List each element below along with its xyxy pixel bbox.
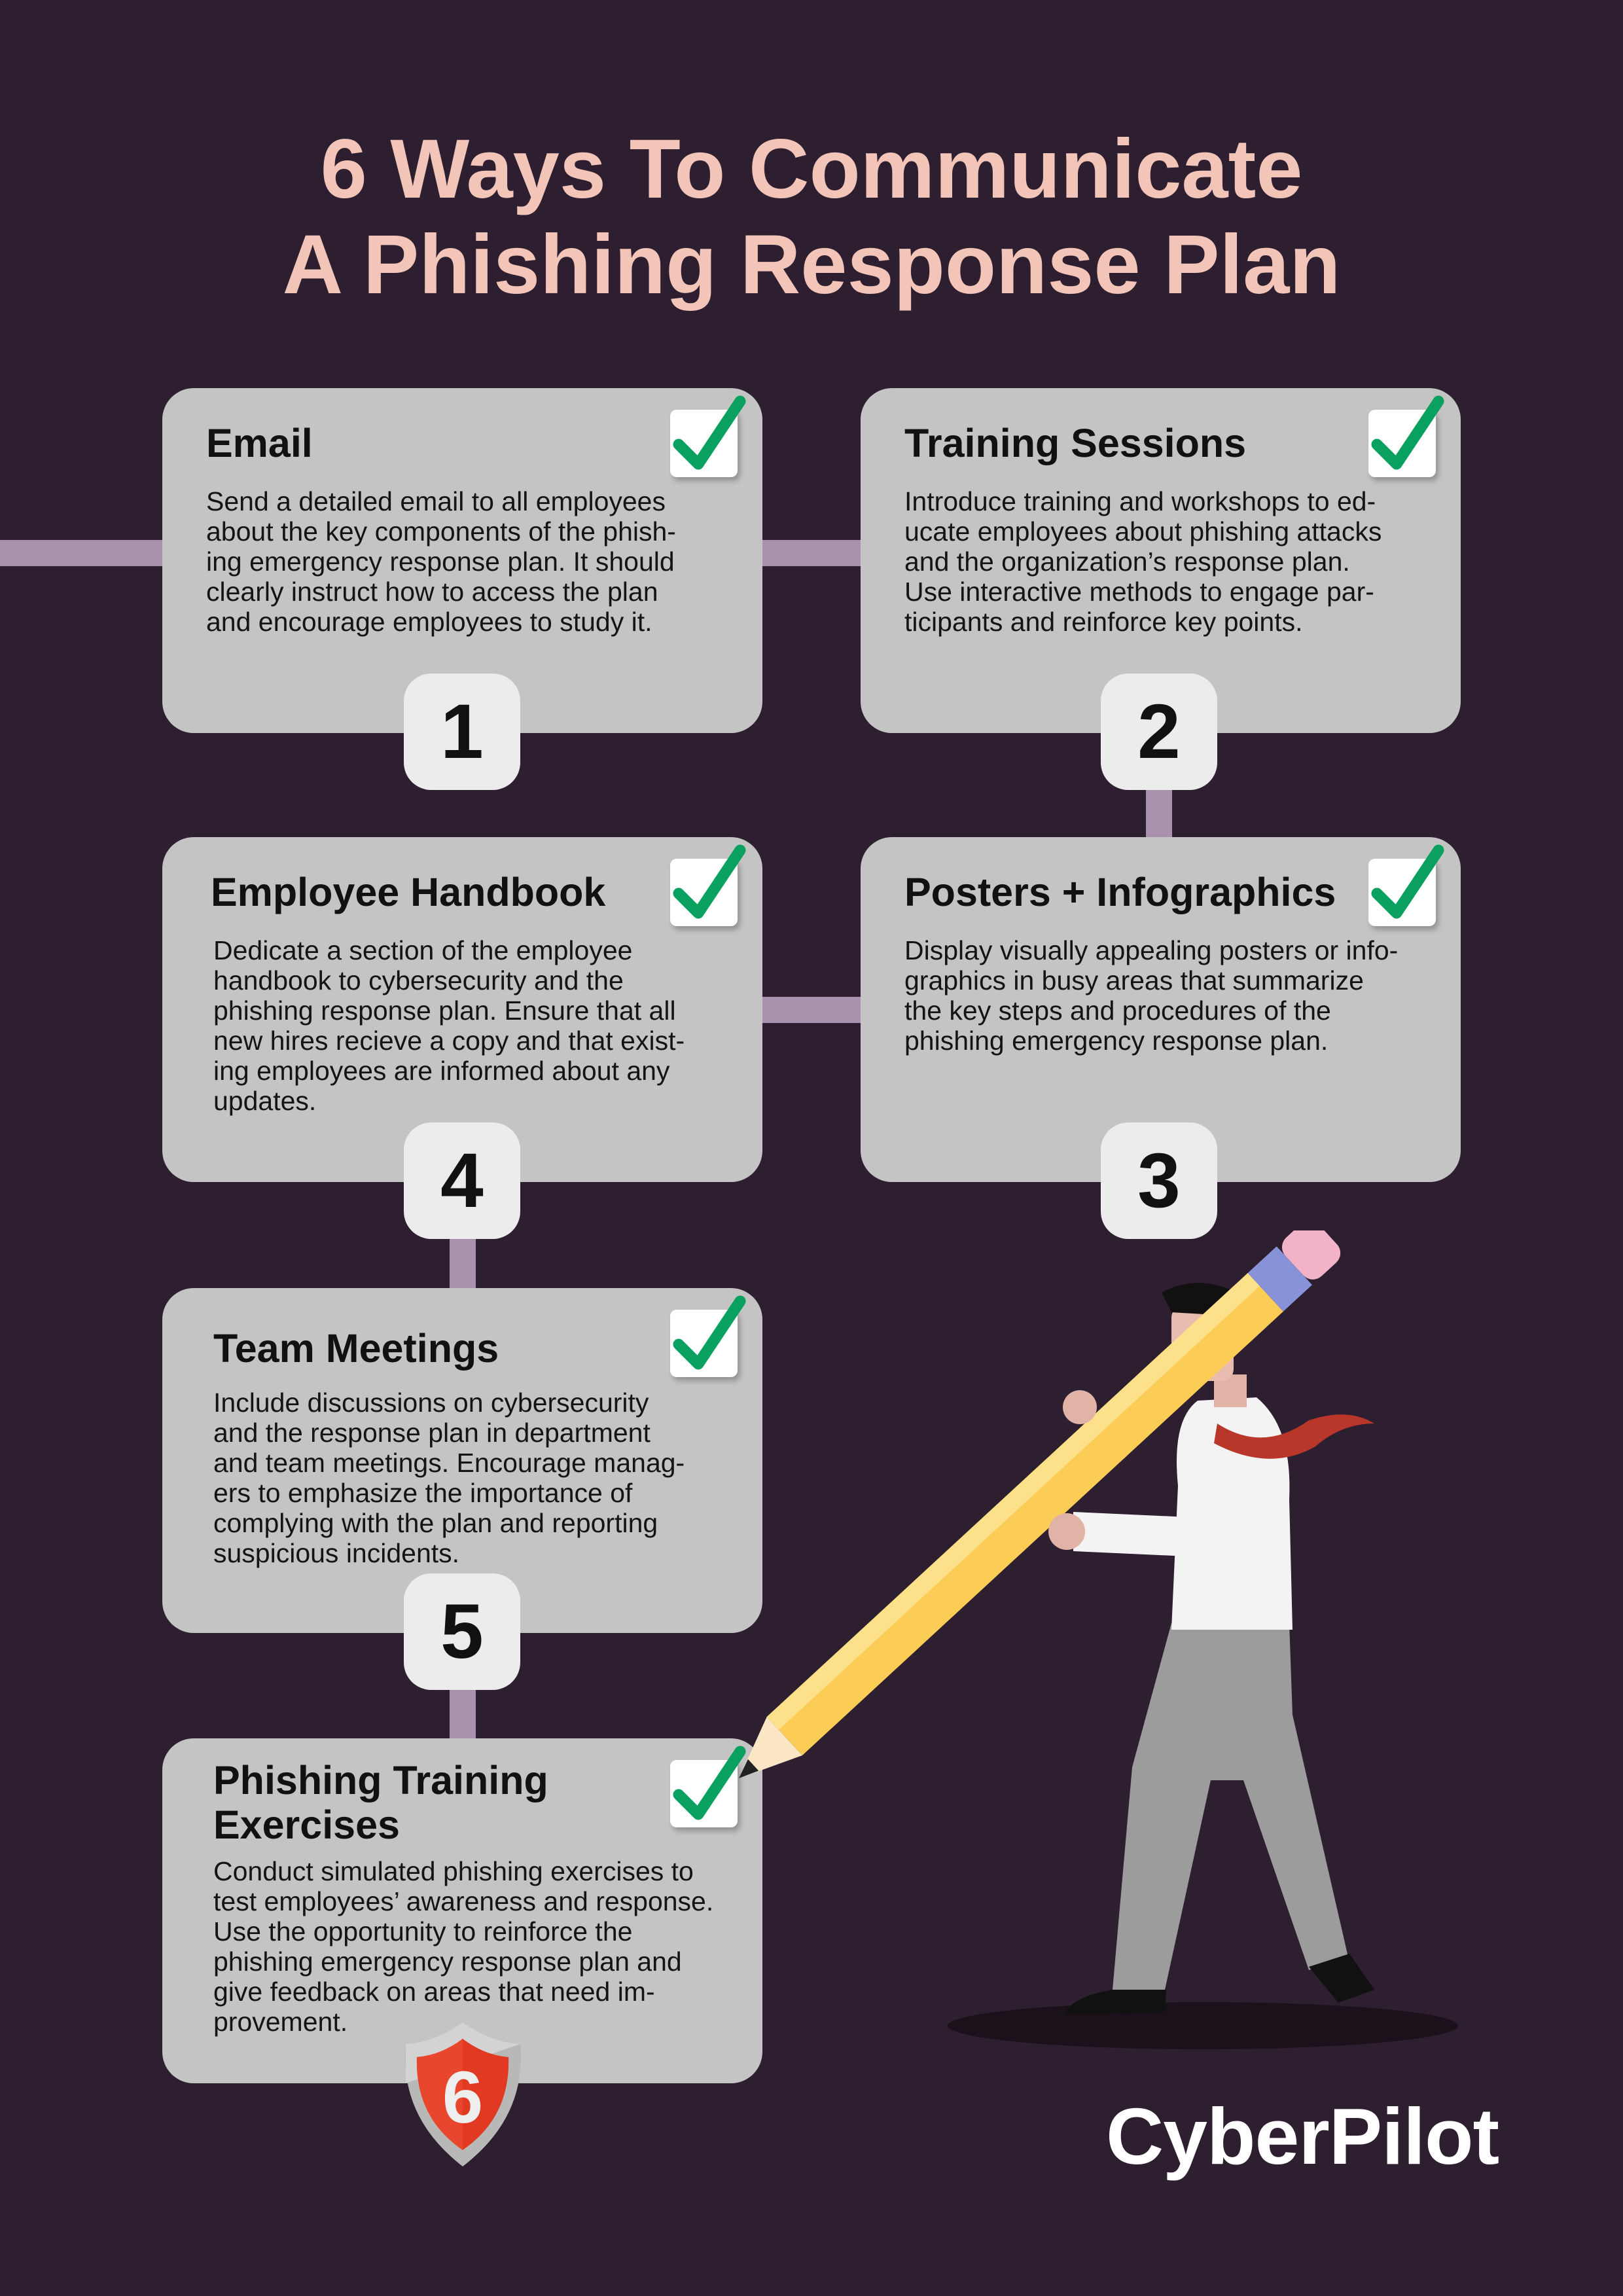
text: meetings: suspicious incidents. xyxy=(213,1538,459,1568)
icon: checkmark xyxy=(670,1310,738,1377)
text: email: and encourage employees to study it. xyxy=(206,607,652,637)
heading: training sessions: Training Sessions xyxy=(904,421,1246,465)
text: exercises: test employees’ awareness and response. xyxy=(213,1886,713,1916)
heading: employee handbook: Employee Handbook xyxy=(211,870,605,914)
heading: posters: Posters + Infographics xyxy=(904,870,1336,914)
text: handbook: Dedicate a section of the employee xyxy=(213,935,632,965)
text: exercises xyxy=(213,1856,713,2037)
text: posters: graphics in busy areas that summarize xyxy=(904,965,1364,996)
connector: badge 5 to card 6 xyxy=(450,1685,476,1748)
text: training: ucate employees about phishing attacks xyxy=(904,516,1382,547)
text: training: ticipants and reinforce key points. xyxy=(904,607,1302,637)
pencil xyxy=(721,1215,1346,1797)
connector: left edge to card 1 xyxy=(0,540,170,566)
heading: exercises: Exercises xyxy=(213,1803,400,1847)
badge: 4 xyxy=(404,1122,520,1239)
title: A Phishing Response Plan xyxy=(283,218,1340,312)
connector: card 4 to card 3 xyxy=(753,997,870,1023)
heading: exercises: Phishing Training xyxy=(213,1758,548,1803)
arms xyxy=(1073,1512,1217,1558)
logo: CyberPilot: CyberPilot xyxy=(1106,2092,1499,2181)
shadow xyxy=(948,2002,1458,2049)
icon: checkmark xyxy=(1368,410,1436,477)
text: training: Use interactive methods to engage par- xyxy=(904,577,1374,607)
text: posters: the key steps and procedures of the xyxy=(904,996,1331,1026)
badge: 2: 2 xyxy=(1137,689,1181,775)
text: exercises: Conduct simulated phishing exercises to xyxy=(213,1856,694,1886)
badge: 3: 3 xyxy=(1137,1138,1181,1224)
icon: checkmark xyxy=(670,1760,738,1827)
heading: exercises xyxy=(213,1758,548,1847)
badge: 3 xyxy=(1101,1122,1217,1239)
icon: shield 6: 6 xyxy=(442,2056,483,2138)
text: meetings: and team meetings. Encourage manag- xyxy=(213,1448,685,1478)
illustration: man with pencil xyxy=(739,1230,1458,2049)
text: exercises: phishing emergency response plan and xyxy=(213,1946,682,1977)
text: email: ing emergency response plan. It should xyxy=(206,547,675,577)
text: posters: Display visually appealing posters or info- xyxy=(904,935,1398,965)
badge: 2 xyxy=(1101,673,1217,790)
badge: 5 xyxy=(404,1573,520,1690)
title: 6 Ways To Communicate xyxy=(321,122,1302,216)
text: meetings: complying with the plan and reporting xyxy=(213,1508,658,1538)
icon: checkmark xyxy=(670,859,738,926)
panel: email xyxy=(162,388,762,733)
text: handbook: handbook to cybersecurity and the xyxy=(213,965,624,996)
legs xyxy=(1113,1623,1348,1990)
text: exercises: give feedback on areas that need im- xyxy=(213,1977,655,2007)
panel: posters + infographics xyxy=(861,837,1461,1182)
text: handbook: updates. xyxy=(213,1086,316,1116)
icon: checkmark xyxy=(670,410,738,477)
text: exercises: Use the opportunity to reinforce the xyxy=(213,1916,632,1946)
text: posters: phishing emergency response plan. xyxy=(904,1026,1328,1056)
text: exercises: provement. xyxy=(213,2007,348,2037)
tie xyxy=(1214,1414,1374,1459)
badge: 1: 1 xyxy=(440,689,484,775)
text: email xyxy=(206,486,676,637)
badge: 1 xyxy=(404,673,520,790)
shirt xyxy=(1171,1397,1293,1630)
title xyxy=(283,122,1340,312)
text: training xyxy=(904,486,1382,637)
text: email: clearly instruct how to access the plan xyxy=(206,577,658,607)
text: training: and the organization’s response plan. xyxy=(904,547,1350,577)
text: email: about the key components of the phish- xyxy=(206,516,676,547)
text: meetings: Include discussions on cybersecurity xyxy=(213,1388,649,1418)
icon: checkmark xyxy=(1368,859,1436,926)
text: email: Send a detailed email to all employees xyxy=(206,486,666,516)
shoes xyxy=(1063,1990,1166,2015)
text: handbook xyxy=(213,935,685,1116)
text: handbook: new hires recieve a copy and that exist- xyxy=(213,1026,685,1056)
badge: 4: 4 xyxy=(440,1138,484,1224)
neck/head xyxy=(1214,1374,1247,1407)
connector: badge 2 to card 3 xyxy=(1146,785,1172,844)
text: meetings xyxy=(213,1388,685,1568)
text: handbook: ing employees are informed about any xyxy=(213,1056,669,1086)
text: meetings: and the response plan in department xyxy=(213,1418,651,1448)
panel: phishing training exercises xyxy=(162,1738,762,2083)
panel: employee handbook xyxy=(162,837,762,1182)
panel: training sessions xyxy=(861,388,1461,733)
connector: card 1 to card 2 xyxy=(753,540,870,566)
text: meetings: ers to emphasize the importance of xyxy=(213,1478,632,1508)
text: training: Introduce training and workshops to ed- xyxy=(904,486,1376,516)
heading: team meetings: Team Meetings xyxy=(213,1326,499,1371)
icon: shield 6 xyxy=(405,2022,521,2166)
heading: email: Email xyxy=(206,421,313,465)
panel: team meetings xyxy=(162,1288,762,1633)
text: handbook: phishing response plan. Ensure that all xyxy=(213,996,676,1026)
badge: 5: 5 xyxy=(440,1588,484,1675)
text: posters xyxy=(904,935,1398,1056)
connector: badge 4 to card 5 xyxy=(450,1234,476,1296)
